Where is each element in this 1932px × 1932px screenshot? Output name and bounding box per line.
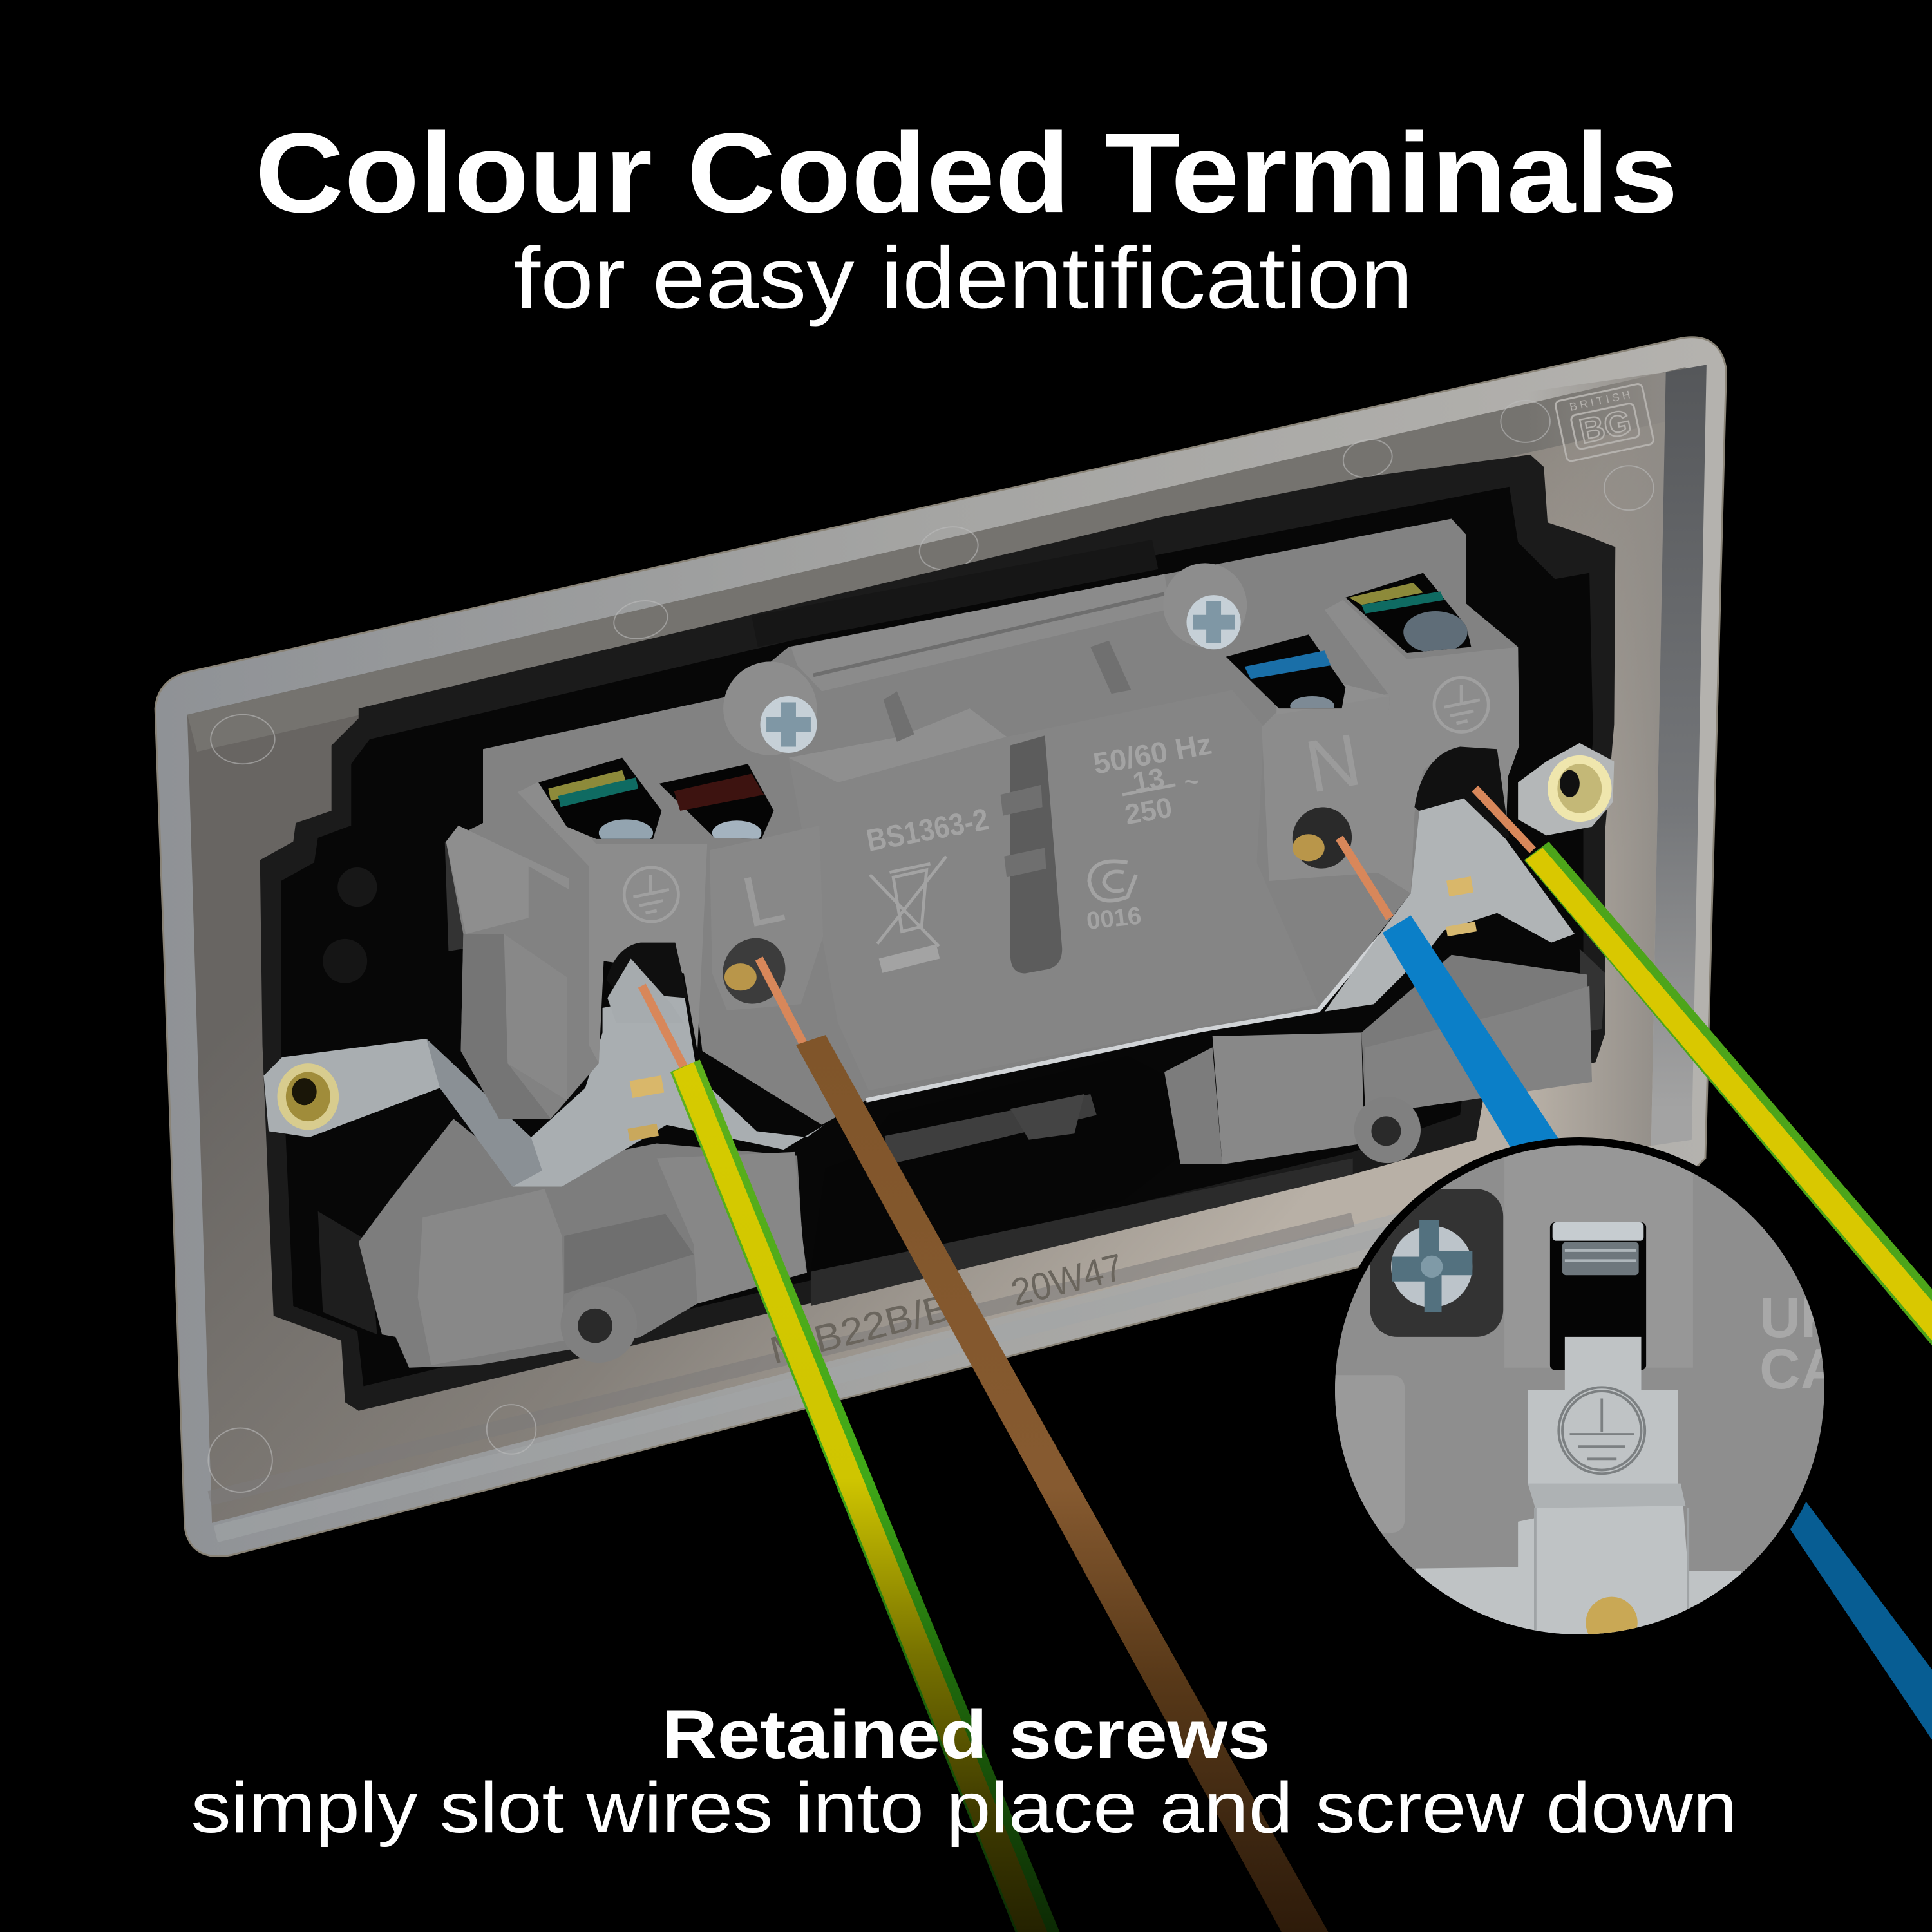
- side moulding: [1335, 1375, 1405, 1533]
- title: Colour Coded Terminals: [255, 110, 1678, 236]
- markings: rating: 50/60 Hz: [1091, 726, 1214, 781]
- side recess: [504, 934, 567, 1101]
- wire slot with colour band: left earth: [538, 758, 661, 846]
- UKCA mark: [1759, 1285, 1841, 1401]
- wire slot with colour band: live: [659, 764, 774, 845]
- caption heading: Retained screws: [661, 1696, 1271, 1773]
- letter L: L: [735, 857, 791, 943]
- central opening: [811, 1056, 1353, 1306]
- grey terminal module: [446, 518, 1575, 1125]
- brass rivet: [1586, 1597, 1638, 1649]
- wire: neutral blue, upper: [1340, 838, 1567, 1164]
- terminal opening: neutral: [1283, 799, 1360, 877]
- dark screw recess: [1370, 1189, 1503, 1337]
- socket faceplate: [155, 337, 1726, 1557]
- steel strap: left ear: [263, 992, 824, 1186]
- black side tab: upper left: [445, 842, 463, 951]
- markings: rating: [1091, 726, 1214, 831]
- cross-head screw: [1391, 1220, 1472, 1312]
- caption text: simply slot wires into place and screw down: [191, 1768, 1738, 1848]
- terminal ear: left earth: [518, 758, 707, 1063]
- mounting boss: left: [561, 1286, 637, 1363]
- black side tab: lower left: [318, 1211, 377, 1334]
- metal contact: [1416, 1337, 1741, 1651]
- markings: BS number: BS1363-2: [864, 802, 991, 858]
- UKCA mark: CA: [1759, 1337, 1841, 1401]
- wire: earth right: [1475, 788, 1932, 1345]
- brass eyelet: right: [1548, 755, 1612, 822]
- wire slot with colour band: right earth: [1345, 573, 1471, 653]
- terminal aperture: [1550, 1222, 1646, 1370]
- markings: 0016: 0016: [1085, 902, 1142, 935]
- markings: rating: 13: [1130, 762, 1167, 799]
- terminal ear: neutral: [1226, 634, 1390, 881]
- letter N: N: [1300, 718, 1367, 809]
- symbol: earth right: [1434, 677, 1488, 732]
- brand mark: BRITISH: [1568, 388, 1631, 413]
- engraved code: M B22B/BS: [765, 1279, 981, 1372]
- retaining screw: right: [1163, 563, 1247, 649]
- brass eyelet: left: [277, 1063, 339, 1130]
- engraved code: [765, 1245, 1127, 1372]
- top retaining bar: [791, 574, 1171, 691]
- raised centre panel: [1504, 1140, 1693, 1368]
- black mounting frame: [260, 455, 1615, 1411]
- terminal opening: left earth: [606, 943, 688, 998]
- brand mark: [1555, 383, 1654, 462]
- magnified inset circle: [1335, 1137, 1824, 1634]
- mounting boss: right: [1354, 1097, 1421, 1163]
- wire slot with colour band: neutral: [1226, 634, 1345, 716]
- raised centre block: [788, 690, 1318, 1090]
- terminal opening: live: [712, 928, 796, 1014]
- subtitle: for easy identification: [514, 229, 1414, 327]
- retaining screw: left: [723, 661, 817, 755]
- lower housing: right: [1164, 955, 1592, 1164]
- wire: neutral blue, lower: [1774, 1479, 1932, 1740]
- steel tab: right earth: [1325, 799, 1575, 1012]
- icon: approval mark: [1089, 861, 1136, 901]
- steel strap: right ear: [1518, 743, 1614, 835]
- wire: earth left: [642, 986, 1059, 1932]
- brand mark: BG: [1577, 403, 1634, 451]
- terminal opening: right earth: [1414, 746, 1510, 838]
- terminal ear: right earth: [1325, 573, 1519, 893]
- symbol: earth left: [624, 867, 678, 922]
- icon: crossed-out bin: [870, 857, 946, 973]
- markings: rating: ~: [1184, 768, 1198, 795]
- earth symbol stamp: [1558, 1387, 1645, 1473]
- markings: rating: 250: [1122, 791, 1175, 831]
- wire: live brown: [759, 959, 1328, 1932]
- lower housing: left: [359, 1119, 807, 1368]
- UKCA mark: UK: [1759, 1285, 1841, 1349]
- terminal ear: live: [659, 764, 786, 1004]
- engraved code: 20W47: [1007, 1245, 1127, 1314]
- side wing: [446, 826, 569, 934]
